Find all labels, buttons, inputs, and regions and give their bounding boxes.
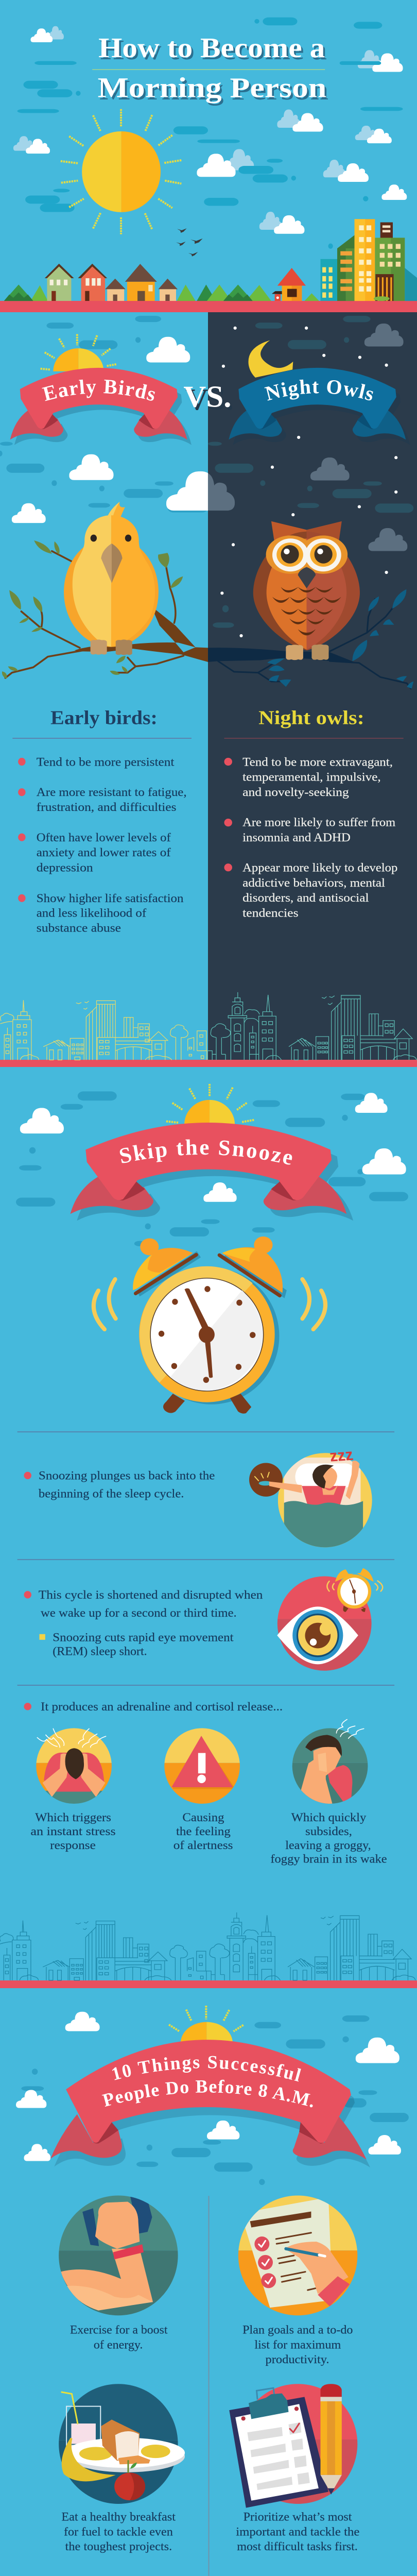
bullet 3: anxiety and lower rates of	[37, 846, 171, 859]
fact: adrenaline and cortisol: It produces an adrenaline and cortisol release...	[41, 1700, 283, 1713]
houses	[45, 264, 306, 301]
banner text: Night Owls	[265, 379, 373, 401]
sky pills	[16, 1091, 408, 1246]
icon: alarm clock	[94, 1236, 325, 1414]
bullet 2: insomnia and ADHD	[242, 831, 351, 844]
banner text: skip the snooze and 10 things: Skip the Snooze	[119, 1140, 292, 1164]
caption: groggy brain: Which quickly	[291, 1811, 367, 1824]
fact: cycle shortened: we wake up for a second or third time.	[41, 1606, 237, 1620]
bullet 1	[18, 755, 175, 769]
hero clouds	[13, 26, 407, 234]
bullet 2	[18, 786, 187, 814]
banner text: skip the snooze and 10 things: People Do Before 8 A.M.	[102, 2079, 313, 2107]
bullet 4	[18, 891, 183, 935]
icon: sun	[61, 109, 181, 234]
heading: Early birds: Early birds:	[50, 706, 158, 728]
icon: sleeper hitting snooze: zzz	[328, 1446, 354, 1465]
bullet 3: disorders, and antisocial	[242, 891, 369, 905]
banner text: skip the snooze and 10 things: 10 Things Successful	[112, 2056, 301, 2081]
panel: things 1 to 4	[59, 2194, 359, 2508]
caption: plan goals	[242, 2323, 353, 2366]
bullet 1: and novelty-seeking	[242, 786, 349, 799]
title: How to Become a Morning Person: Morning Person	[99, 74, 328, 106]
dividers	[12, 738, 404, 739]
bullet 3	[18, 831, 171, 874]
title: How to Become a Morning Person: How to Become a	[100, 34, 327, 66]
skyline: yellow day and teal night	[1, 992, 416, 1060]
caption: alertness: of alertness	[173, 1839, 233, 1852]
stars	[220, 327, 397, 637]
banner: skip the snooze ribbon	[71, 1123, 353, 1221]
clouds	[16, 2012, 401, 2161]
bullet 3	[224, 861, 397, 920]
icon: right branch	[208, 589, 413, 689]
caption: breakfast: the toughest projects.	[65, 2540, 172, 2553]
icon: checklist and hand	[237, 2195, 359, 2316]
caption: breakfast: Eat a healthy breakfast	[61, 2510, 176, 2523]
caption: prioritize	[236, 2510, 359, 2553]
fact: cycle shortened	[24, 1588, 263, 1658]
icon: yellow bird	[64, 502, 159, 655]
divider lines	[18, 1432, 394, 1685]
icon: healthy breakfast	[59, 2384, 185, 2504]
icon: eye and alarm clock	[276, 1568, 383, 1672]
caption: exercise: of energy.	[94, 2338, 143, 2351]
caption: plan goals: Plan goals and a to-do	[242, 2323, 353, 2336]
title: How to Become a Morning Person: Morning Person	[98, 72, 326, 104]
fact: back into the sleep cycle: beginning of the sleep cycle.	[39, 1487, 184, 1500]
bullet 2: Are more resistant to fatigue,	[37, 786, 187, 799]
panel: early birds vs night owls	[0, 316, 413, 637]
banner: night owls ribbon	[229, 368, 410, 445]
panel: early birds list	[18, 755, 187, 935]
panel: skip the snooze	[16, 1084, 408, 1414]
bullet 1: Tend to be more persistent	[37, 755, 175, 769]
icon: owl	[253, 521, 360, 660]
hero sky pills	[18, 18, 403, 249]
icon: groggy person	[291, 1719, 370, 1805]
icon: moon	[248, 341, 293, 378]
caption: plan goals: productivity.	[266, 2353, 329, 2366]
fact: adrenaline and cortisol	[24, 1700, 283, 1713]
city buildings	[320, 219, 417, 301]
caption: exercise	[70, 2323, 168, 2351]
bullet 4: and less likelihood of	[37, 906, 146, 920]
caption: stress response: an instant stress	[30, 1825, 116, 1838]
panel: snooze facts	[18, 1432, 394, 1685]
title: How to Become a Morning Person	[92, 32, 328, 106]
fact: cycle shortened: This cycle is shortened and disrupted when	[39, 1588, 263, 1601]
heading: VS.	[183, 380, 234, 416]
caption: plan goals: list for maximum	[254, 2338, 341, 2351]
caption: prioritize: Prioritize what’s most	[244, 2510, 352, 2523]
heading: Night owls: Night owls:	[258, 706, 364, 728]
bullet 3: Often have lower levels of	[37, 831, 171, 844]
icon: rising sun	[41, 334, 116, 371]
caption: alertness: Causing	[182, 1811, 224, 1824]
left sky pills	[0, 316, 208, 513]
fact: cycle shortened: (REM) sleep short.	[53, 1645, 147, 1658]
banner text: Early Birds	[42, 379, 155, 401]
bullet 4: substance abuse	[37, 921, 121, 935]
caption: groggy brain: leaving a groggy,	[285, 1839, 371, 1852]
right sky pills	[208, 316, 413, 628]
caption: groggy brain: subsides,	[305, 1825, 352, 1838]
caption: groggy brain	[270, 1811, 387, 1866]
caption: breakfast	[61, 2510, 176, 2553]
heading: VS.: VS.	[186, 383, 234, 416]
panel: village skyline	[4, 219, 417, 301]
banner text: skip the snooze and 10 things	[102, 1140, 313, 2107]
bullet 1	[224, 755, 393, 799]
panel: bird and owl on branch	[2, 502, 413, 738]
panel: night owls list	[224, 755, 397, 920]
banner: 10 things ribbon	[50, 2040, 370, 2167]
panel: 10 things header	[16, 2006, 409, 2576]
clouds	[20, 1093, 406, 1202]
fact: cycle shortened: Snoozing cuts rapid eye movement	[53, 1631, 234, 1644]
icon: rising sun	[169, 2006, 244, 2043]
bullet 2	[224, 816, 395, 844]
caption: stress response	[30, 1811, 116, 1852]
sky pills	[21, 2015, 409, 2185]
panel: hero sky	[13, 18, 407, 257]
caption: breakfast: for fuel to tackle even	[64, 2525, 173, 2538]
icon: birds	[176, 228, 203, 257]
trees	[4, 284, 319, 301]
caption: exercise: Exercise for a boost	[70, 2323, 168, 2336]
banner: early birds ribbon	[10, 368, 192, 445]
icon: sleeper hitting snooze	[249, 1446, 374, 1551]
caption: prioritize: most difficult tasks first.	[237, 2540, 358, 2553]
icon: stress response	[34, 1728, 114, 1805]
bullet 3: depression	[37, 861, 93, 874]
banner text	[42, 379, 373, 401]
clouds	[12, 324, 407, 551]
bullet 2: frustration, and difficulties	[37, 801, 176, 814]
heading: VS.: VS.	[183, 380, 231, 414]
bullet 4: Show higher life satisfaction	[37, 891, 183, 905]
caption: stress response: response	[50, 1839, 96, 1852]
title: How to Become a Morning Person: How to Become a	[98, 32, 325, 63]
icon: left branch	[2, 540, 208, 679]
fact: back into the sleep cycle: Snoozing plunges us back into the	[39, 1469, 215, 1482]
bullet 3: tendencies	[242, 906, 299, 920]
fact: back into the sleep cycle	[24, 1469, 215, 1500]
icon: clipboard and pencil	[229, 2384, 359, 2508]
caption: prioritize: important and tackle the	[236, 2525, 359, 2538]
panel: adrenaline release	[0, 1700, 415, 1980]
icon: alert triangle	[162, 1728, 242, 1805]
icon: flexed arm with dumbbell	[59, 2194, 178, 2316]
divider: vertical column rule	[208, 2196, 210, 2576]
panel: things 3 to 6	[62, 2512, 359, 2553]
skyline: blue	[0, 1912, 415, 1980]
caption: alertness	[173, 1811, 233, 1852]
icon: rising sun	[166, 1084, 254, 1125]
caption: alertness: the feeling	[176, 1825, 231, 1838]
caption: stress response: Which triggers	[35, 1811, 111, 1824]
